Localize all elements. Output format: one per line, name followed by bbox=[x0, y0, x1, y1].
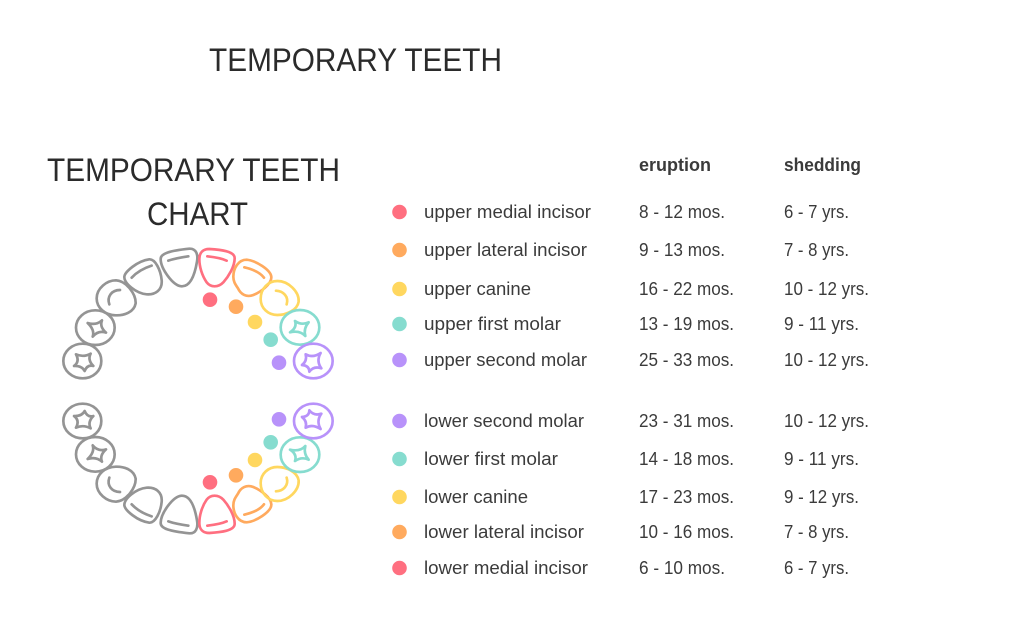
row: upper canine: upper canine bbox=[424, 279, 531, 299]
row: upper lateral incisor: 9 - 13 mos. bbox=[639, 240, 725, 260]
row: lower lateral incisor: 7 - 8 yrs. bbox=[784, 522, 849, 542]
row: lower lateral incisor: lower lateral incisor bbox=[424, 522, 584, 542]
row: upper canine: 10 - 12 yrs. bbox=[784, 279, 869, 299]
row: lower medial incisor bbox=[392, 558, 849, 578]
row: lower lateral incisor bbox=[392, 522, 849, 542]
row: lower second molar: 10 - 12 yrs. bbox=[784, 411, 869, 431]
row: lower canine: 9 - 12 yrs. bbox=[784, 487, 859, 507]
column headers: eruption bbox=[639, 155, 711, 175]
title: TEMPORARY TEETH bbox=[209, 42, 502, 78]
row: upper second molar: 10 - 12 yrs. bbox=[784, 350, 869, 370]
row: lower second molar: 23 - 31 mos. bbox=[639, 411, 734, 431]
row: upper first molar: 9 - 11 yrs. bbox=[784, 314, 859, 334]
row: lower first molar: 9 - 11 yrs. bbox=[784, 449, 859, 469]
row: upper lateral incisor: 7 - 8 yrs. bbox=[784, 240, 849, 260]
row: upper medial incisor: 6 - 7 yrs. bbox=[784, 202, 849, 222]
lower teeth, coloured right side bbox=[199, 404, 333, 533]
upper teeth, coloured right side bbox=[199, 249, 333, 378]
row: lower first molar: 14 - 18 mos. bbox=[639, 449, 734, 469]
row: lower canine: 17 - 23 mos. bbox=[639, 487, 734, 507]
upper teeth, grey left side bbox=[63, 249, 197, 378]
row: upper lateral incisor bbox=[392, 240, 849, 260]
row: lower medial incisor: 6 - 7 yrs. bbox=[784, 558, 849, 578]
column headers: shedding bbox=[784, 155, 861, 175]
row: lower medial incisor: 6 - 10 mos. bbox=[639, 558, 725, 578]
chart heading bbox=[47, 152, 340, 232]
row: upper medial incisor: 8 - 12 mos. bbox=[639, 202, 725, 222]
row: lower second molar bbox=[392, 411, 869, 431]
row: upper second molar bbox=[392, 350, 869, 370]
chart heading: TEMPORARY TEETH bbox=[47, 152, 340, 188]
row: lower second molar: lower second molar bbox=[424, 411, 584, 431]
row: upper medial incisor: upper medial incisor bbox=[424, 202, 591, 222]
row: upper first molar: 13 - 19 mos. bbox=[639, 314, 734, 334]
lower teeth, grey left side bbox=[63, 404, 197, 533]
row: lower canine: lower canine bbox=[424, 487, 528, 507]
row: upper canine: 16 - 22 mos. bbox=[639, 279, 734, 299]
row: upper medial incisor bbox=[392, 202, 849, 222]
row: upper first molar: upper first molar bbox=[424, 314, 561, 334]
row: lower first molar: lower first molar bbox=[424, 449, 558, 469]
row: lower medial incisor: lower medial incisor bbox=[424, 558, 588, 578]
column headers bbox=[639, 155, 861, 175]
row: upper lateral incisor: upper lateral incisor bbox=[424, 240, 587, 260]
chart heading: CHART bbox=[147, 196, 248, 232]
row: upper second molar: upper second molar bbox=[424, 350, 587, 370]
lower tooth dots bbox=[203, 412, 286, 490]
row: lower first molar bbox=[392, 449, 859, 469]
row: upper canine bbox=[392, 279, 869, 299]
row: upper second molar: 25 - 33 mos. bbox=[639, 350, 734, 370]
row: upper first molar bbox=[392, 314, 859, 334]
row: lower lateral incisor: 10 - 16 mos. bbox=[639, 522, 734, 542]
row: lower canine bbox=[392, 487, 859, 507]
upper tooth dots bbox=[203, 292, 286, 370]
